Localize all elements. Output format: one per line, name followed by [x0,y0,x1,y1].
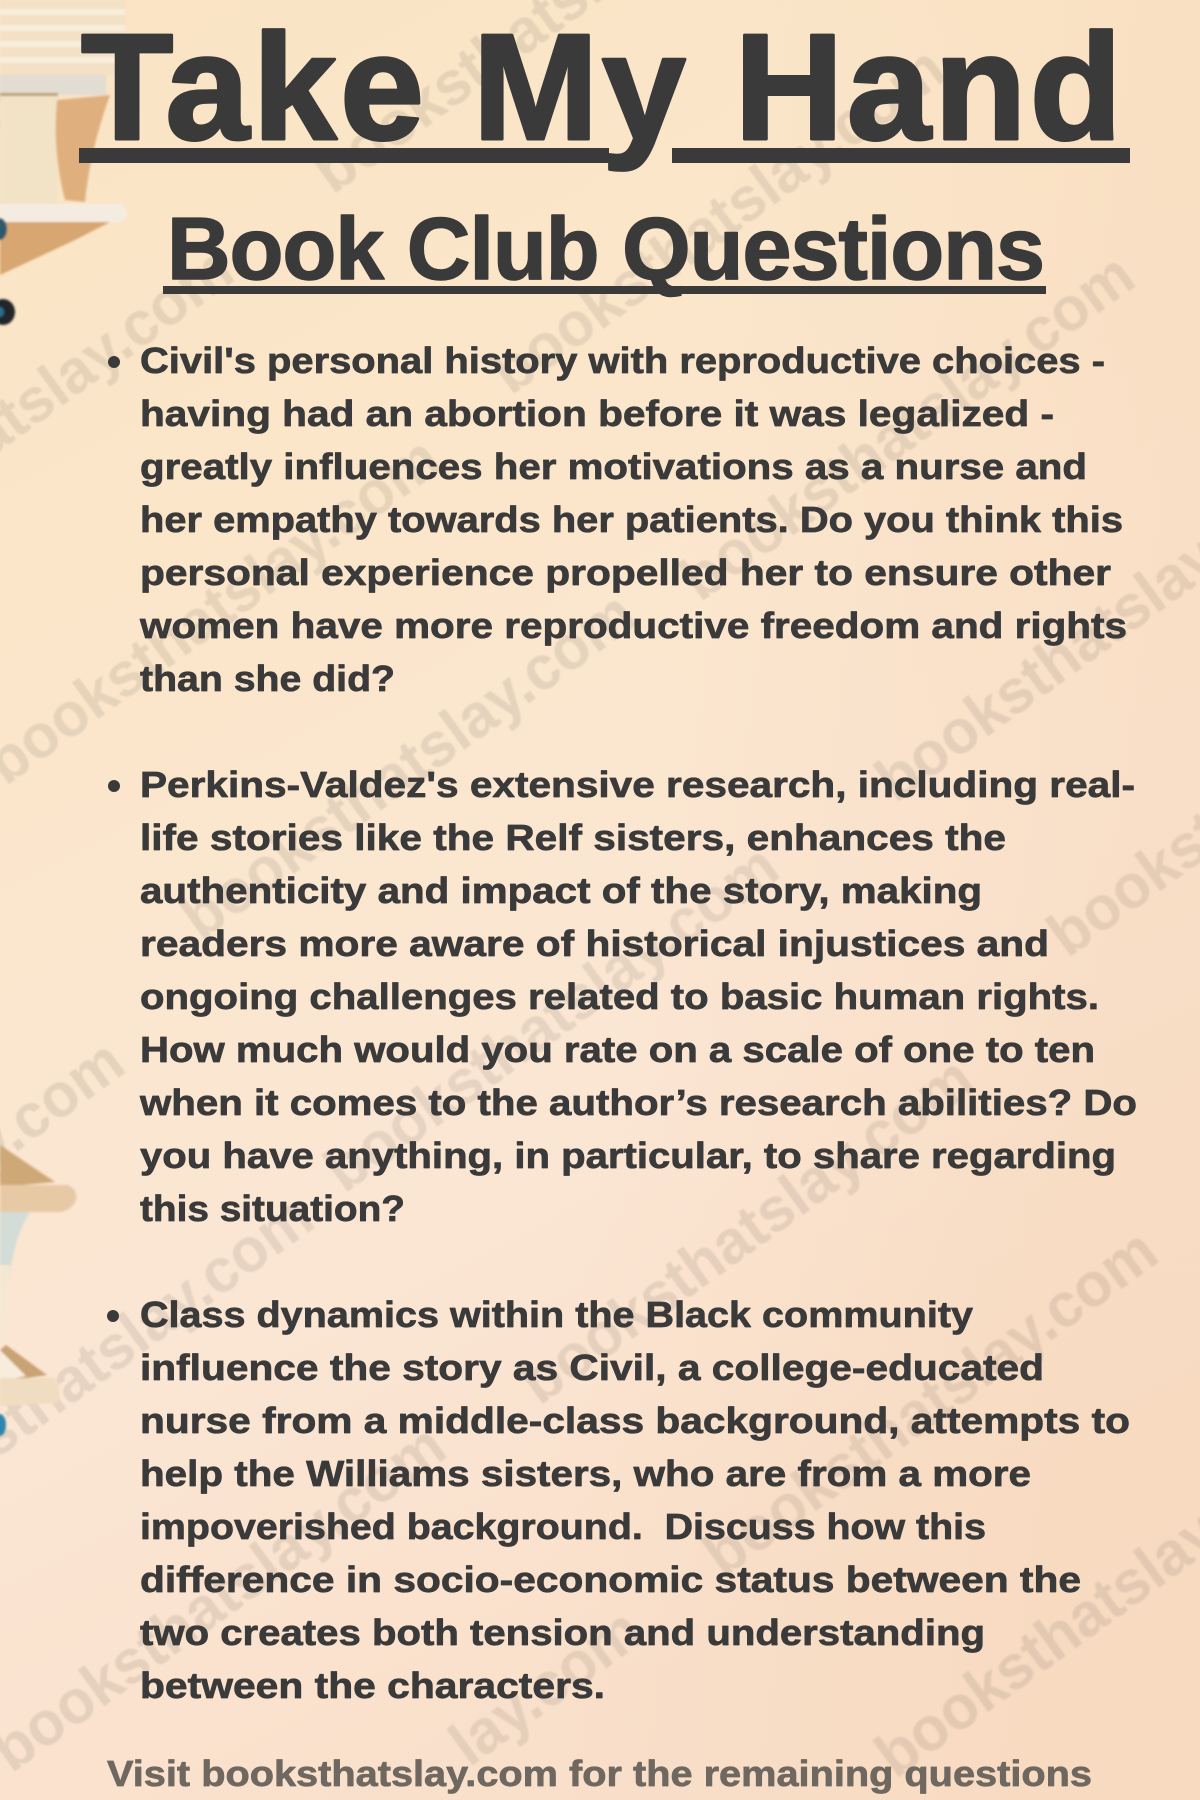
question 1 [108,340,1127,699]
question 2: when it comes to the author’s research abilities? Do [139,1082,1137,1123]
question 2: Perkins-Valdez's extensive research, including real- [140,764,1135,805]
question 2: readers more aware of historical injustices and [140,923,1049,964]
illustration: stacked books upper left [0,0,128,325]
title: Take My Hand [81,2,1122,171]
subtitle: Book Club Questions [167,199,1045,298]
question 2: How much would you rate on a scale of one to ten [140,1029,1095,1070]
watermark pattern: booksthatslay.com [479,33,957,407]
question 1: personal experience propelled her to ensure other [140,552,1111,593]
question 1: her empathy towards her patients. Do you think this [140,499,1123,540]
question 1: than she did? [140,658,395,699]
question 3: Class dynamics within the Black community [140,1294,973,1335]
question 2: ongoing challenges related to basic human rights. [140,976,1099,1017]
question 3: help the Williams sisters, who are from a more [140,1453,1031,1494]
watermark pattern: booksthatslay.com [312,831,791,1205]
question 3: two creates both tension and understanding [140,1612,985,1653]
question 3: impoverished background. Discuss how this [140,1506,986,1547]
question 1: having had an abortion before it was legalized - [140,393,1054,434]
question 3: between the characters. [140,1665,605,1706]
illustration: stacked books lower left [0,1145,76,1436]
question 3 [107,1294,1130,1706]
watermark pattern: booksthatslay.com [668,240,1147,614]
watermark pattern: booksthatslay.com [169,578,647,953]
question 1: Civil's personal history with reproductive choices - [140,340,1105,381]
question 3: influence the story as Civil, a college-educated [140,1347,1044,1388]
question 3: difference in socio-economic status between the [140,1559,1081,1600]
question 2 [108,764,1137,1229]
question 2: this situation? [140,1188,405,1229]
question 2: authenticity and impact of the story, making [140,870,982,911]
watermark pattern: booksthatslay.com [507,1043,986,1418]
question 2: life stories like the Relf sisters, enhances the [140,817,1006,858]
footer call to action: Visit booksthatslay.com for the remaining questions [107,1753,1092,1794]
watermark pattern: booksthatslay.com [691,1216,1170,1590]
question 1: women have more reproductive freedom and rights [139,605,1127,646]
watermark pattern: lay.com [437,1595,654,1779]
question 2: you have anything, in particular, to share regarding [140,1135,1116,1176]
question 1: greatly influences her motivations as a nurse and [140,446,1087,487]
question 3: nurse from a middle-class background, attempts to [140,1400,1130,1441]
